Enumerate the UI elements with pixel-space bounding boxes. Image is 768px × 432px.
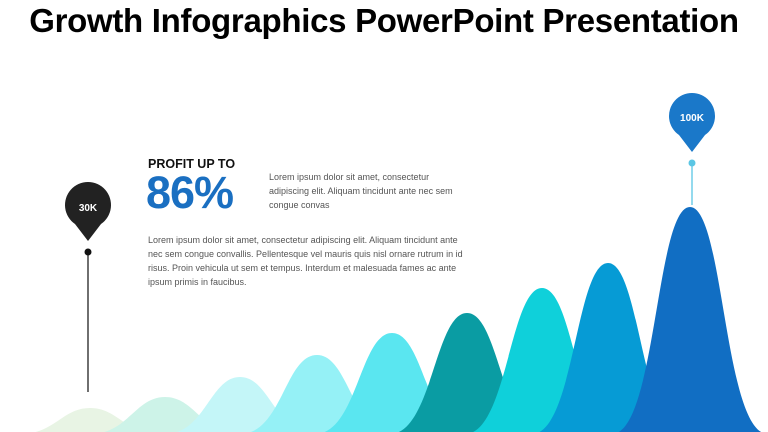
bell 6 bbox=[390, 313, 544, 432]
pin: 30K bbox=[65, 182, 111, 392]
bell 1 bbox=[20, 408, 160, 432]
bell 5 bbox=[315, 333, 469, 432]
text block: paragraph: Lorem ipsum dolor sit amet, consectetur adipiscing elit. Aliquam tincidunt ante nec sem congue convallis. Pellentesque vel mauris quis nisl ornare rutrum in id risus. Proin vehicula ut sem et tempus. Interdum et malesuada fames ac ante ipsum primis in faucibus. bbox=[148, 235, 463, 287]
bell 7 bbox=[465, 288, 619, 432]
pin: 100K bbox=[669, 93, 715, 205]
bell 4 bbox=[240, 355, 394, 432]
bell 9 bbox=[612, 207, 768, 432]
title: Growth Infographics PowerPoint Presentation bbox=[29, 2, 739, 39]
bell 8 bbox=[532, 263, 684, 432]
pin: 100K: 100K bbox=[680, 113, 705, 124]
stat: 86%: 86% bbox=[146, 167, 233, 218]
heading: profit up to: PROFIT UP TO bbox=[148, 157, 235, 171]
pin: 30K: 30K bbox=[79, 203, 98, 214]
text block: stat description: Lorem ipsum dolor sit amet, consectetur adipiscing elit. Aliquam tincidunt ante nec sem congue convas bbox=[269, 172, 453, 210]
bell 3 bbox=[165, 377, 315, 432]
bell 2 bbox=[90, 397, 240, 432]
